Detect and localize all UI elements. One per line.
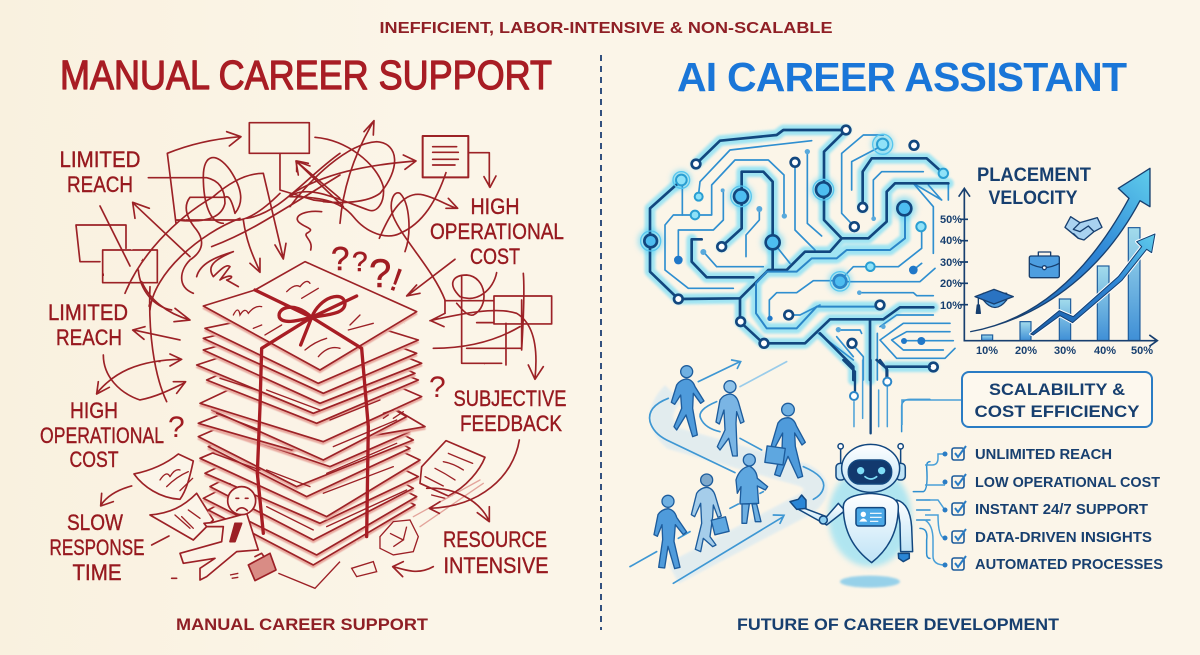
placement velocity heading: PLACEMENT — [977, 164, 1091, 186]
top caption: INEFFICIENT, LABOR-INTENSIVE & NON-SCALABLE — [380, 20, 833, 37]
circuit brain — [634, 123, 956, 387]
chart graphics — [959, 168, 1157, 346]
scalability callout — [902, 372, 1152, 427]
chart y ticks: 20% — [940, 278, 962, 290]
chart y ticks: 10% — [940, 300, 962, 312]
label: limited reach top: LIMITED — [60, 147, 140, 172]
label: limited reach top: REACH — [67, 172, 133, 197]
label: high operational cost right: OPERATIONAL — [430, 219, 564, 244]
label: slow response time: TIME — [72, 560, 122, 585]
walker 3 with briefcase — [765, 403, 805, 478]
walker 6 — [654, 495, 687, 569]
exclamation mark: ! — [386, 261, 407, 298]
chart x ticks: 30% — [1054, 345, 1076, 357]
tangled arrows lower left — [97, 282, 213, 578]
label: high operational cost right: COST — [470, 244, 520, 269]
label: slow response time: RESPONSE — [50, 535, 144, 560]
chart x ticks — [976, 345, 1153, 357]
scalability callout: COST EFFICIENCY — [974, 403, 1140, 421]
crumpled paper — [380, 520, 418, 555]
chart y ticks: 50% — [940, 214, 962, 226]
ribbon bow — [255, 290, 368, 537]
chart x ticks: 50% — [1131, 345, 1153, 357]
tangled arrows and document upper right — [290, 121, 552, 379]
label: limited reach top — [60, 147, 140, 197]
growth chart — [940, 168, 1157, 357]
title: ai career assistant: AI CAREER ASSISTANT — [677, 54, 1127, 100]
path — [630, 360, 824, 583]
walker 1 — [671, 366, 704, 437]
placement velocity heading: VELOCITY — [988, 187, 1078, 209]
question marks: ? — [331, 240, 349, 277]
icon: briefcase — [1029, 252, 1059, 278]
check: instant support: INSTANT 24/7 SUPPORT — [975, 501, 1148, 518]
left question mark: ? — [168, 411, 185, 444]
label: slow response time — [50, 510, 144, 585]
tangled arrows and boxes upper left — [76, 123, 340, 310]
walker 2 — [716, 381, 744, 456]
walker 4 in skirt — [736, 454, 768, 523]
robot assistant — [790, 444, 913, 588]
question marks: ? — [352, 246, 368, 277]
label: high operational cost right: HIGH — [470, 194, 520, 219]
label: slow response time: SLOW — [67, 510, 124, 535]
panel: manual career support doodles — [40, 121, 566, 588]
label: high operational cost left — [40, 398, 164, 472]
fallen worker — [180, 487, 276, 581]
label: limited reach lower: REACH — [56, 325, 122, 350]
label: resource intensive — [443, 527, 548, 578]
walker 5 with briefcase — [691, 474, 729, 552]
label: subjective feedback: SUBJECTIVE — [454, 386, 566, 411]
label: high operational cost right — [430, 194, 564, 269]
right question mark: ? — [429, 371, 446, 404]
chart x ticks: 40% — [1094, 345, 1116, 357]
icon: handshake — [1065, 217, 1102, 240]
people on career path — [630, 360, 824, 583]
label: subjective feedback — [454, 386, 566, 436]
chart x ticks: 20% — [1015, 345, 1037, 357]
question marks: ? — [369, 252, 391, 296]
label: limited reach lower: LIMITED — [48, 300, 128, 325]
chart y ticks: 30% — [940, 257, 962, 269]
label: resource intensive: RESOURCE — [443, 527, 547, 552]
chart y ticks: 40% — [940, 235, 962, 247]
panel: ai career assistant — [629, 123, 1163, 589]
label: high operational cost left: COST — [70, 447, 119, 472]
scalability callout: SCALABILITY & — [989, 381, 1125, 399]
chart x ticks: 10% — [976, 345, 998, 357]
label: resource intensive: INTENSIVE — [444, 553, 548, 578]
lower right arrows and paper — [393, 440, 519, 577]
loose paper left — [134, 454, 193, 499]
check: automated processes: AUTOMATED PROCESSES — [975, 556, 1163, 573]
label: high operational cost left: HIGH — [70, 398, 118, 423]
check: data-driven insights: DATA-DRIVEN INSIGHTS — [975, 529, 1152, 546]
brain stem traces — [843, 360, 930, 558]
paper pile — [180, 262, 425, 588]
check: low operational cost: LOW OPERATIONAL COST — [975, 474, 1160, 491]
icon: graduation cap — [975, 289, 1013, 313]
left bottom caption: MANUAL CAREER SUPPORT — [176, 615, 429, 634]
center dashed divider — [600, 55, 602, 630]
chart y ticks — [940, 214, 962, 312]
title: manual career support: MANUAL CAREER SUPPORT — [60, 52, 552, 98]
label: high operational cost left: OPERATIONAL — [40, 423, 164, 448]
label: subjective feedback: FEEDBACK — [460, 411, 562, 436]
right bottom caption: FUTURE OF CAREER DEVELOPMENT — [737, 615, 1060, 634]
placement velocity heading — [977, 164, 1091, 209]
benefits checklist — [925, 446, 1163, 573]
check: unlimited reach: UNLIMITED REACH — [975, 446, 1112, 463]
label: limited reach lower — [48, 300, 128, 350]
